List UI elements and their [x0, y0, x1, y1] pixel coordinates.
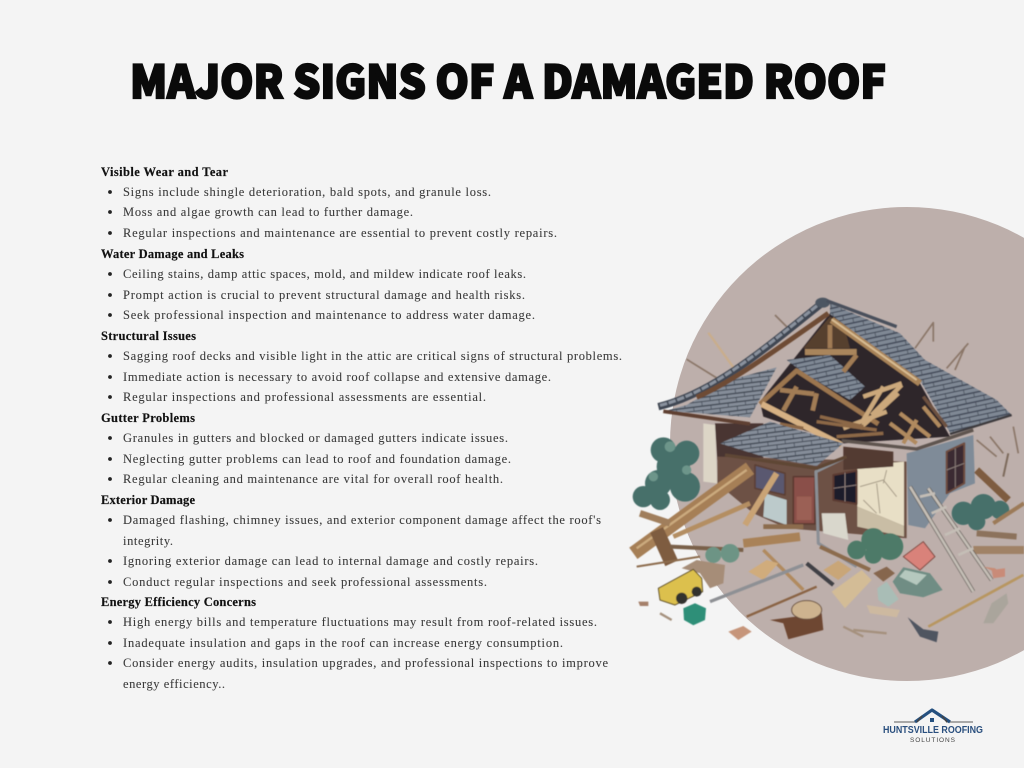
section: exterior damage: [101, 493, 601, 589]
hammer: [908, 575, 1023, 642]
right roof slope: [830, 303, 1012, 433]
panel: list of roof damage signs: [101, 165, 622, 691]
section: water damage and leaks: Ceiling stains, damp attic spaces, mold, and mildew indicate roof leaks.: [123, 267, 526, 281]
decorative circle behind house: [670, 207, 1024, 681]
section: exterior damage: Ignoring exterior damage can lead to internal damage and costly repairs.: [123, 554, 538, 568]
drain pipe: [816, 458, 857, 567]
title: MAJOR SIGNS OF A DAMAGED ROOF: [130, 46, 886, 111]
section: visible wear and tear: Moss and algae growth can lead to further damage.: [123, 205, 413, 219]
toy truck: [658, 569, 703, 605]
section: gutter problems: Gutter Problems: [101, 411, 195, 425]
section: structural issues: [101, 329, 622, 404]
section: visible wear and tear: [101, 165, 557, 240]
section: gutter problems: Neglecting gutter problems can lead to roof and foundation damage.: [123, 452, 511, 466]
flower bushes: [705, 528, 903, 564]
logo name: HUNTSVILLE ROOFING: [883, 725, 983, 736]
section: energy efficiency concerns: Consider energy audits, insulation upgrades, and professional inspections to improve: [123, 656, 608, 670]
section: energy efficiency concerns: Energy Efficiency Concerns: [101, 595, 256, 609]
section: energy efficiency concerns: High energy bills and temperature fluctuations may result from roof-related issues.: [123, 615, 597, 629]
logo: Huntsville Roofing Solutions: [883, 710, 983, 744]
fallen planks: [633, 453, 1024, 590]
section: exterior damage: Exterior Damage: [101, 493, 195, 507]
section: exterior damage: Damaged flashing, chimney issues, and exterior component damage affect the roof's: [123, 513, 601, 527]
section: gutter problems: Regular cleaning and maintenance are vital for overall roof health.: [123, 472, 503, 486]
section: water damage and leaks: Water Damage and Leaks: [101, 247, 244, 261]
section: structural issues: Immediate action is necessary to avoid roof collapse and extensive damage.: [123, 370, 551, 384]
stray sticks behind roof: [687, 315, 1018, 457]
ladder rails and rungs: [910, 487, 992, 592]
ladder: [910, 487, 992, 592]
illustration: damaged house: [633, 298, 1024, 642]
logo tagline: SOLUTIONS: [910, 737, 956, 744]
bushes: [633, 437, 1009, 530]
section: gutter problems: Granules in gutters and blocked or damaged gutters indicate issues.: [123, 431, 508, 445]
hand tool: [983, 593, 1008, 623]
section: water damage and leaks: [101, 247, 535, 322]
green box: [683, 603, 706, 625]
left roof slope: [667, 367, 777, 417]
section: visible wear and tear: Regular inspections and maintenance are essential to prevent costly repairs.: [123, 226, 557, 240]
red brick: [903, 542, 935, 570]
rocks: [877, 567, 943, 607]
section: water damage and leaks: Seek professional inspection and maintenance to address water damage.: [123, 308, 535, 322]
ridge cap: [815, 298, 830, 308]
house walls: [703, 423, 975, 540]
section: exterior damage: integrity.: [123, 534, 173, 548]
porch fascia and gutter: [725, 455, 847, 468]
barge board: [697, 313, 828, 397]
section: energy efficiency concerns: Inadequate insulation and gaps in the roof can increase energy consumption.: [123, 636, 563, 650]
section: structural issues: Regular inspections and professional assessments are essential.: [123, 390, 486, 404]
logo icon: roof: [894, 710, 973, 722]
section: energy efficiency concerns: [101, 595, 608, 691]
section: visible wear and tear: Signs include shingle deterioration, bald spots, and granule loss.: [123, 185, 491, 199]
ground debris: [638, 560, 1005, 640]
roof ridge edge: [658, 303, 822, 407]
section: visible wear and tear: Visible Wear and Tear: [101, 165, 228, 179]
section: structural issues: Sagging roof decks and visible light in the attic are critical signs of structural problems.: [123, 349, 622, 363]
lower porch roof: [720, 422, 843, 466]
collapsed roof cavity: [760, 313, 950, 443]
section: exterior damage: Conduct regular inspections and seek professional assessments.: [123, 575, 487, 589]
section: energy efficiency concerns: energy efficiency..: [123, 677, 225, 691]
exposed rafters: [760, 319, 947, 445]
section: structural issues: Structural Issues: [101, 329, 196, 343]
section: water damage and leaks: Prompt action is crucial to prevent structural damage and health risks.: [123, 288, 525, 302]
section: gutter problems: [101, 411, 511, 486]
